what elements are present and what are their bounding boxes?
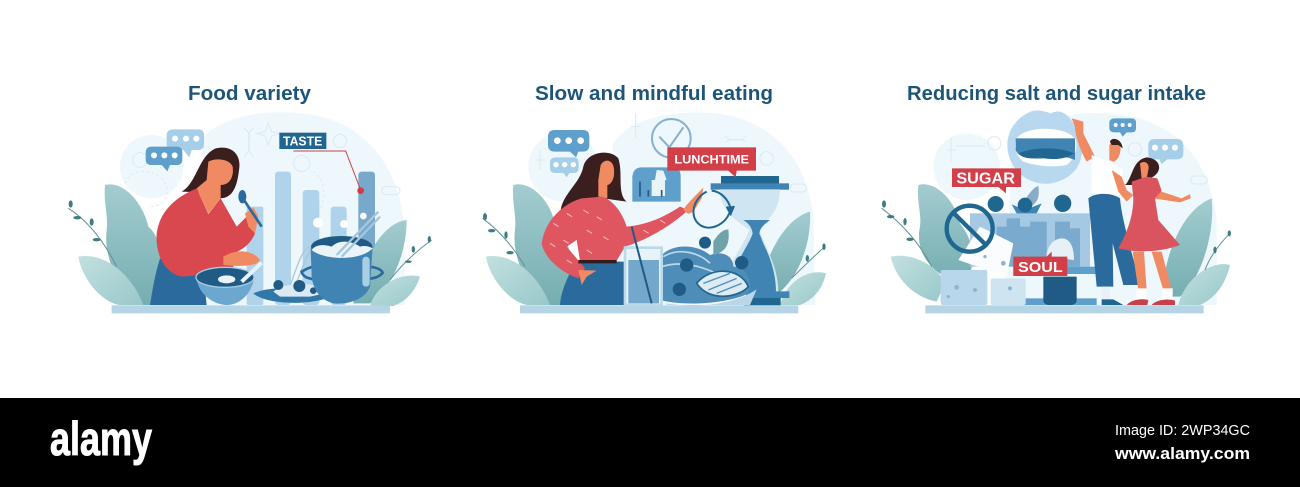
label: taste: TASTE — [283, 134, 323, 149]
table — [520, 305, 798, 313]
icon: check mark clock — [652, 119, 691, 158]
salt shaker — [1043, 238, 1077, 305]
skyline block — [970, 213, 1097, 305]
panel: reducing salt and sugar intake — [882, 83, 1231, 313]
icon: thumbs up card — [632, 167, 681, 202]
label: taste — [279, 133, 364, 194]
speech bubbles — [548, 130, 589, 177]
pot with chopsticks — [302, 212, 383, 304]
speech bubbles — [146, 129, 204, 171]
speech bubbles — [1109, 118, 1183, 164]
table — [112, 305, 390, 313]
leaves — [882, 184, 1231, 305]
heading: slow and mindful eating: Slow and mindful eating — [535, 83, 773, 105]
icons: faint science symbols — [536, 113, 807, 192]
bowl — [196, 263, 262, 305]
panel: food variety — [68, 83, 432, 313]
woman eating — [150, 148, 262, 305]
label: lunchtime — [667, 147, 756, 177]
footer bar — [0, 398, 1300, 487]
icons: faint science symbols — [125, 123, 400, 217]
hourglass — [711, 176, 789, 305]
label: soul: SOUL — [1018, 260, 1063, 276]
heading: reducing salt and sugar intake: Reducing salt and sugar intake — [907, 83, 1206, 105]
logo: alamy: alamy — [50, 412, 152, 465]
panel: slow and mindful eating — [483, 83, 826, 313]
label: sugar — [952, 168, 1021, 193]
image id: Image ID: 2WP34GC — [1115, 423, 1250, 439]
label: lunchtime: LUNCHTIME — [674, 152, 749, 166]
icons: faint science symbols — [947, 137, 1207, 184]
leaves — [68, 184, 432, 306]
woman — [1112, 157, 1191, 305]
noodles plate — [661, 229, 757, 305]
illustration: mindful eating — [483, 113, 826, 313]
icon: open mouth bubble — [1007, 111, 1082, 184]
icon: prohibition sign — [947, 206, 993, 252]
illustration: food variety — [68, 112, 432, 313]
bar chart — [247, 172, 375, 305]
man — [1072, 118, 1140, 305]
blueberries — [988, 186, 1071, 213]
table — [925, 305, 1204, 313]
glass with straw — [625, 227, 662, 305]
cycle arrow — [693, 191, 734, 228]
plate with noodles and berries — [253, 247, 337, 303]
sugar cubes — [941, 227, 1026, 305]
website: www.alamy.com — [1114, 445, 1250, 463]
illustration: salt and sugar — [882, 111, 1231, 313]
woman with hand raised — [542, 153, 703, 305]
leaves — [483, 184, 826, 305]
heading: food variety: Food variety — [188, 83, 312, 105]
label: sugar: SUGAR — [956, 171, 1015, 188]
label: soul — [1013, 252, 1067, 276]
